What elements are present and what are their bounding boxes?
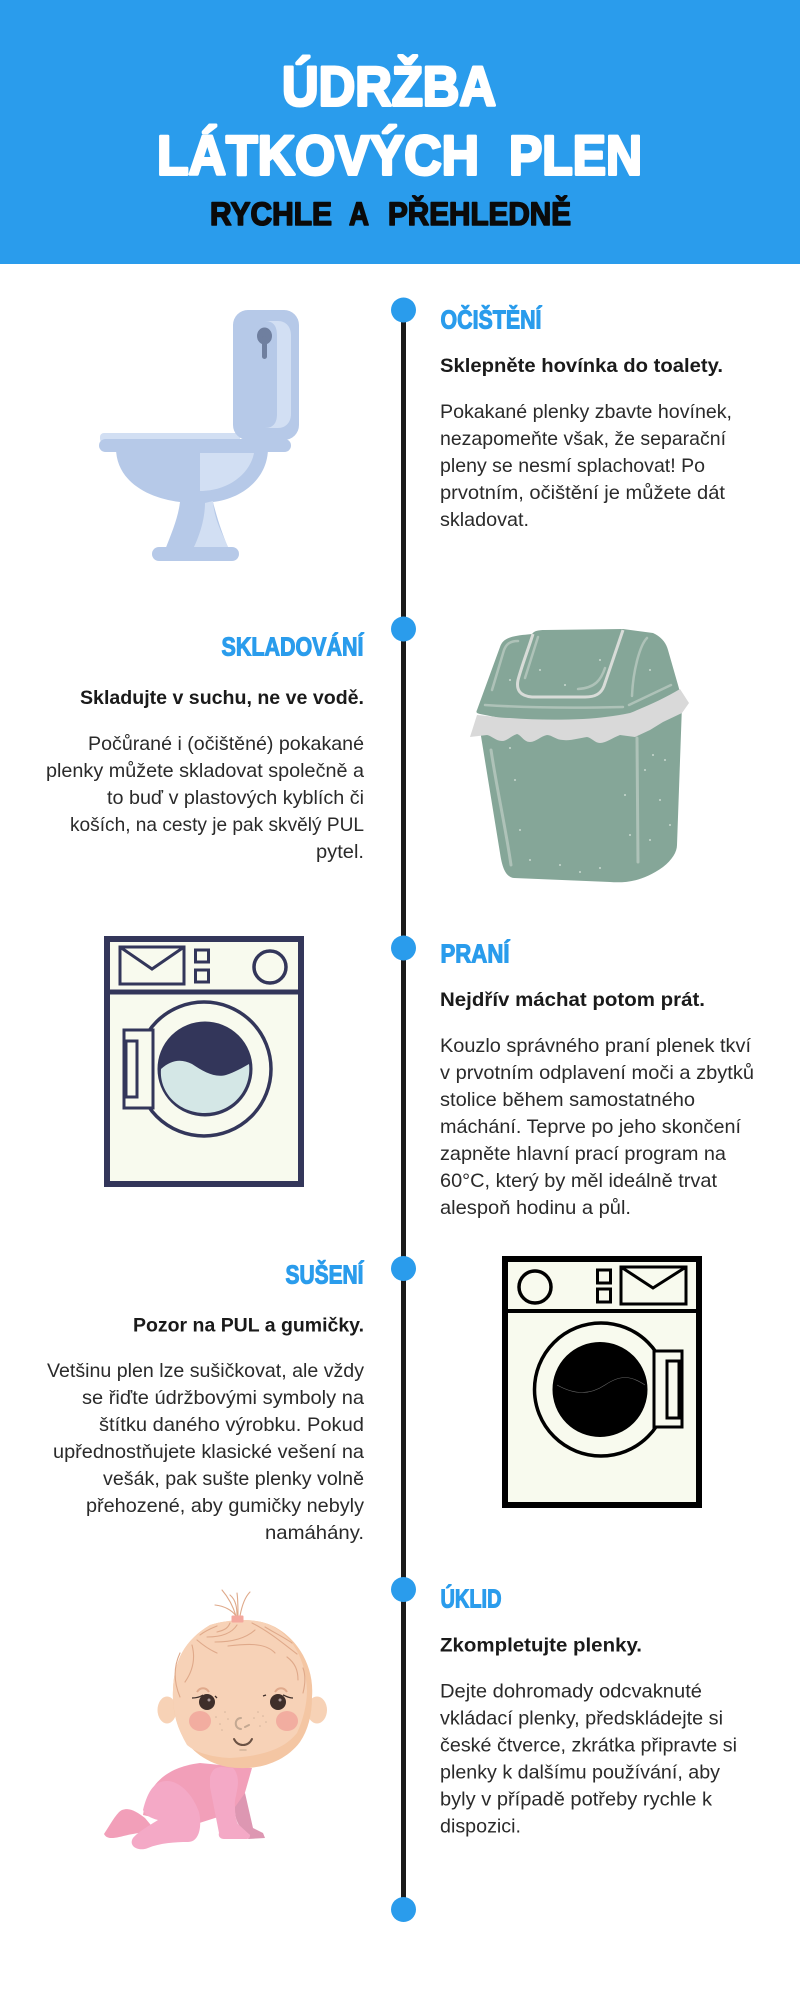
front arm bbox=[210, 1767, 250, 1839]
door bbox=[137, 1002, 271, 1136]
head bbox=[173, 1620, 312, 1768]
back arm shade bbox=[235, 1793, 265, 1839]
body text: alespoň hodinu a půl. bbox=[440, 1197, 631, 1219]
body text: vkládací plenky, předskládejte si bbox=[440, 1708, 723, 1730]
body text: přehozené, aby gumičky nebyly bbox=[86, 1495, 364, 1517]
front leg bbox=[132, 1781, 200, 1849]
body text: české čtverce, zkrátka připravte si bbox=[440, 1734, 737, 1756]
title: PLEN bbox=[509, 124, 642, 186]
title: LÁTKOVÝCH bbox=[157, 124, 479, 186]
lace bbox=[470, 689, 689, 743]
section: praní bbox=[440, 938, 754, 1219]
hair tuft bbox=[215, 1590, 250, 1616]
subtitle: RYCHLE bbox=[210, 196, 332, 232]
body text: plenky můžete skladovat společně a bbox=[46, 760, 364, 782]
body text: se řiďte údržbovými symboly na bbox=[82, 1387, 364, 1409]
body text: namáhány. bbox=[265, 1522, 364, 1544]
body text: Dejte dohromady odcvaknuté bbox=[440, 1680, 702, 1702]
body text: pytel. bbox=[316, 841, 364, 863]
subheading: Zkompletujte plenky. bbox=[440, 1634, 642, 1656]
heading: OČIŠTĚNÍ bbox=[440, 304, 542, 334]
body text bbox=[47, 1360, 364, 1544]
subheading: Skladujte v suchu, ne ve vodě. bbox=[80, 687, 364, 709]
title: ÚDRŽBA bbox=[282, 54, 496, 118]
heading: ÚKLID bbox=[440, 1584, 502, 1614]
subtitle bbox=[210, 196, 571, 232]
title bbox=[157, 54, 642, 186]
body text bbox=[440, 401, 732, 531]
body text: Pokakané plenky zbavte hovínek, bbox=[440, 401, 732, 423]
body text: stolice během samostatného bbox=[440, 1089, 695, 1111]
back foot bbox=[104, 1809, 155, 1838]
icon: washing machine navy bbox=[107, 939, 301, 1184]
body text: Vetšinu plen lze sušičkovat, ale vždy bbox=[47, 1360, 364, 1382]
heading: PRANÍ bbox=[440, 938, 510, 968]
body text: v prvotním odplavení moči a zbytků bbox=[440, 1062, 754, 1084]
body text: Počůrané i (očištěné) pokakané bbox=[88, 733, 364, 755]
body text: plenky k dalšímu používání, aby bbox=[440, 1762, 720, 1784]
body text: koších, na cesty je pak skvělý PUL bbox=[70, 814, 364, 836]
body text: zapněte hlavní prací program na bbox=[440, 1143, 726, 1165]
body text: máchání. Teprve po jeho skončení bbox=[440, 1116, 742, 1138]
body bbox=[143, 1763, 252, 1826]
buttons bbox=[196, 950, 208, 962]
section: sušení bbox=[47, 1260, 364, 1544]
body text: vešák, pak sušte plenky volně bbox=[103, 1468, 364, 1490]
body text bbox=[440, 1680, 737, 1838]
lid details bbox=[485, 637, 671, 708]
section: úklid bbox=[440, 1584, 737, 1838]
door bbox=[534, 1323, 668, 1456]
icon: washing machine black bbox=[505, 1259, 699, 1505]
body text bbox=[440, 1035, 754, 1219]
body text: Kouzlo správného praní plenek tkví bbox=[440, 1035, 752, 1057]
body text: pleny se nesmí splachovat! Po bbox=[440, 455, 705, 477]
nose and mouth bbox=[215, 1711, 267, 1750]
section: očištění bbox=[440, 304, 732, 531]
icon: toilet bbox=[99, 310, 299, 561]
subheading: Pozor na PUL a gumičky. bbox=[133, 1314, 364, 1336]
body text: prvotním, očištění je můžete dát bbox=[440, 482, 726, 504]
head hair bbox=[175, 1623, 305, 1697]
subheading: Nejdřív máchat potom prát. bbox=[440, 989, 705, 1011]
heading: SUŠENÍ bbox=[286, 1260, 364, 1290]
lid bbox=[476, 629, 680, 722]
section: skladování bbox=[46, 632, 364, 863]
body text: štítku daného výrobku. Pokud bbox=[99, 1414, 364, 1436]
subheading: Sklepněte hovínka do toalety. bbox=[440, 355, 723, 377]
heading: SKLADOVÁNÍ bbox=[222, 632, 364, 662]
timeline bbox=[391, 298, 416, 1922]
icon: crawling baby bbox=[104, 1590, 327, 1849]
topknot bbox=[232, 1616, 244, 1622]
envelope bbox=[621, 1267, 686, 1304]
body text: nezapomeňte však, že separační bbox=[440, 428, 727, 450]
body text: 60°C, který by měl ideálně trvat bbox=[440, 1170, 718, 1192]
envelope bbox=[120, 947, 184, 984]
subtitle: A bbox=[349, 196, 369, 232]
ears bbox=[158, 1696, 176, 1724]
body text: to buď v plastových kyblích či bbox=[107, 787, 364, 809]
body text: dispozici. bbox=[440, 1816, 521, 1838]
cheeks bbox=[189, 1711, 211, 1731]
eyes bbox=[192, 1688, 293, 1710]
body text: skladovat. bbox=[440, 509, 529, 531]
body text: upřednostňujete klasické vešení na bbox=[53, 1441, 364, 1463]
body text bbox=[46, 733, 364, 863]
icon: bin bbox=[470, 629, 689, 882]
subtitle: PŘEHLEDNĚ bbox=[388, 196, 571, 232]
bin body bbox=[480, 705, 682, 882]
header banner bbox=[0, 0, 800, 264]
body text: byly v případě potřeby rychle k bbox=[440, 1788, 712, 1810]
